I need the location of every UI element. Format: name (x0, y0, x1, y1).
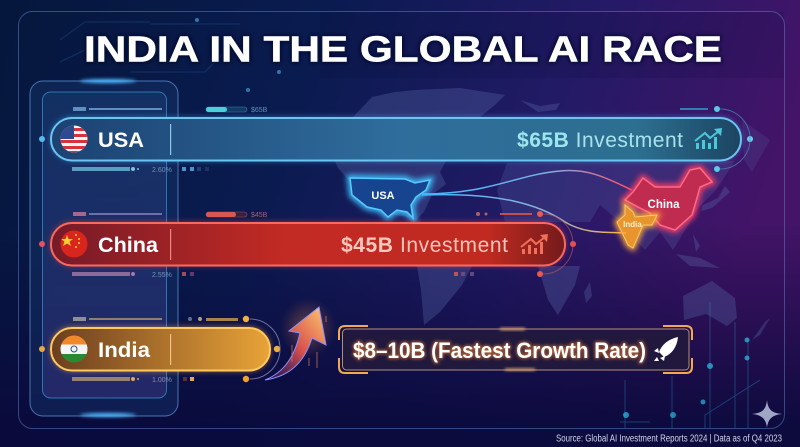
China bar (50, 222, 566, 266)
circuit glow decoration (620, 302, 760, 428)
USA decorative data ticks (39, 106, 753, 174)
row: China (39, 211, 576, 279)
map region: USA (350, 178, 430, 218)
map: USA, China, India with arcs (350, 168, 712, 248)
callout: fastest growth rate (339, 326, 692, 373)
map region: USA: USA (371, 190, 395, 202)
icon: rocket (654, 337, 678, 361)
icon: growth chart red (521, 234, 548, 254)
value: $65B Investment: $65B Investment (517, 129, 683, 152)
value: $45B Investment: $45B Investment (341, 234, 508, 257)
icon: India flag (60, 336, 88, 362)
row: India (39, 316, 280, 384)
world map (335, 88, 770, 340)
China decorative data ticks: 2.55% (152, 272, 172, 279)
icon: upward growth arrow (265, 298, 336, 380)
map region: India (617, 205, 657, 248)
label: USA: USA (98, 129, 144, 152)
USA decorative data ticks: 2.60% (152, 167, 172, 174)
callout text: $8–10B (Fastest Growth Rate) (353, 338, 646, 363)
map region: China: China (648, 199, 680, 211)
callout text: $8–10B (Fastest Growth Rate) (353, 338, 646, 363)
left glass panel (30, 79, 178, 417)
India decorative data ticks: 1.00% (152, 377, 172, 384)
icon: USA flag (60, 126, 88, 152)
China decorative data ticks: $45B (251, 212, 268, 219)
icon: sparkle (752, 400, 782, 428)
title: INDIA IN THE GLOBAL AI RACE (84, 28, 722, 70)
icon: China flag (60, 230, 88, 258)
icon: growth chart teal (695, 128, 722, 149)
label: India: India (98, 339, 150, 362)
title: INDIA IN THE GLOBAL AI RACE (84, 28, 722, 70)
map region: India: India (623, 220, 642, 229)
China decorative data ticks (39, 211, 576, 279)
India decorative data ticks (39, 316, 280, 384)
flow arcs (422, 171, 632, 233)
USA bar (50, 117, 742, 161)
row: USA (39, 106, 753, 174)
India bar (50, 327, 270, 371)
map region: China (625, 168, 712, 230)
label: China: China (98, 234, 158, 257)
USA decorative data ticks: $65B (251, 107, 268, 114)
